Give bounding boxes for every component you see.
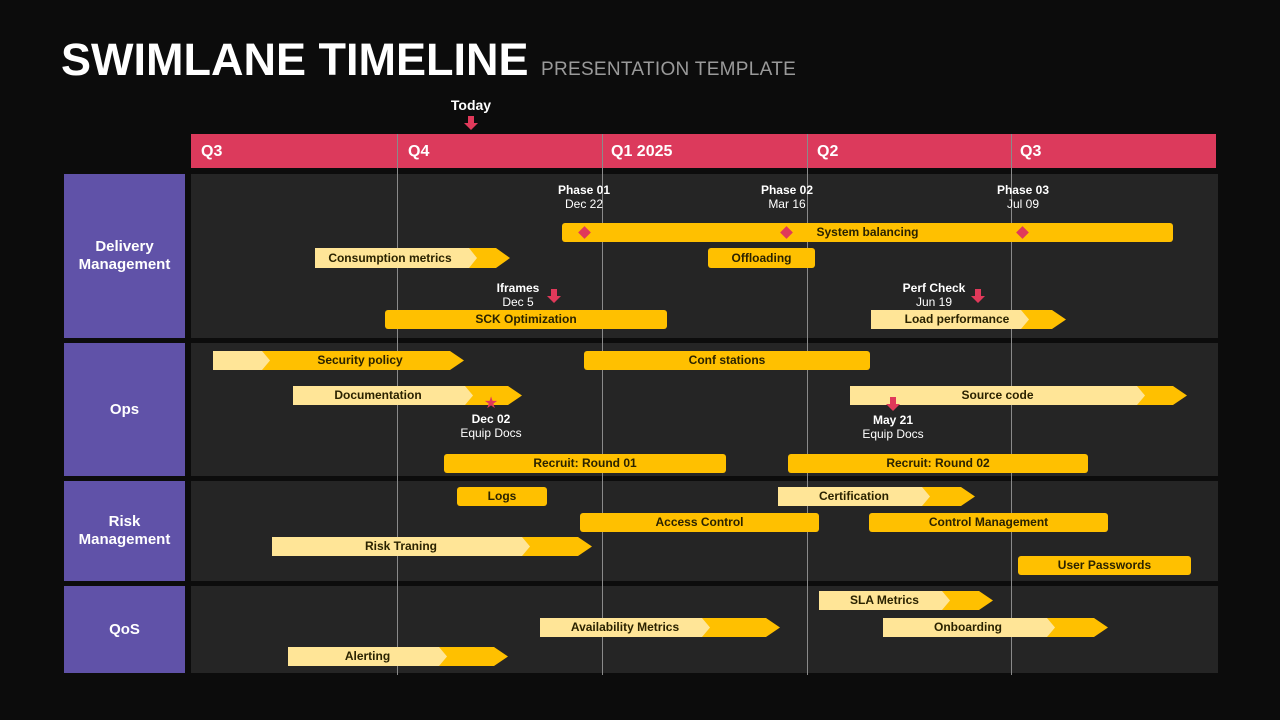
text: Q1 2025 — [611, 143, 672, 160]
bar: Recruit Round 01 — [444, 454, 726, 473]
bar: Documentation: Documentation — [334, 388, 422, 402]
bar: System balancing — [562, 223, 1173, 242]
milestone: Iframes: Dec 5 — [502, 295, 534, 309]
bar: Source code: Source code — [961, 388, 1034, 402]
milestone: Perf Check: Perf Check — [903, 281, 965, 295]
milestone: May 21 — [886, 397, 900, 411]
bar: Risk Traning: Risk Traning — [365, 539, 437, 553]
today marker — [451, 97, 491, 130]
quarter labels — [201, 143, 1041, 160]
bar: User Passwords: User Passwords — [1058, 558, 1151, 572]
bar: Source code — [850, 386, 1187, 405]
milestone: Dec 02 star: ★ — [484, 395, 498, 412]
bar: User Passwords — [1018, 556, 1191, 575]
title: SWIMLANE TIMELINE PRESENTATION TEMPLATE — [61, 34, 796, 85]
lane label: Delivery Management: Management — [79, 256, 170, 273]
lanes — [191, 174, 1218, 338]
bar: Onboarding: Onboarding — [934, 620, 1002, 634]
milestone: Iframes: Iframes — [497, 281, 539, 295]
milestone: Dec 02 star: Dec 02 — [472, 412, 510, 426]
text: Phase 02 — [761, 183, 813, 197]
bar: Alerting: Alerting — [345, 649, 390, 663]
bar: Consumption metrics: Consumption metrics — [328, 251, 452, 265]
bar: Onboarding — [883, 618, 1108, 637]
bar: Control Management — [869, 513, 1108, 532]
text: Q4 — [408, 143, 429, 160]
bar: Certification: Certification — [819, 489, 889, 503]
bar: Offloading: Offloading — [732, 251, 792, 265]
bar: Load performance: Load performance — [905, 312, 1009, 326]
bar: Recruit Round 02: Recruit: Round 02 — [886, 456, 990, 470]
milestone: Dec 02 star: Equip Docs — [460, 426, 522, 440]
lane label: Ops — [64, 343, 185, 476]
lane label: Risk Management: Management — [79, 531, 170, 548]
text: Q3 — [201, 143, 222, 160]
bar: Access Control — [580, 513, 819, 532]
lane label: Risk Management — [64, 481, 185, 581]
bar: Certification — [778, 487, 975, 506]
bar: Alerting — [288, 647, 508, 666]
milestones: phases: Dec 22 — [565, 197, 603, 211]
today marker: Today — [451, 97, 491, 113]
text: Q2 — [817, 143, 838, 160]
milestone: Dec 02 star — [460, 395, 522, 440]
bar: Logs: Logs — [488, 489, 516, 503]
bar: Offloading — [708, 248, 815, 268]
bar: Documentation — [293, 386, 522, 405]
bar: System balancing: System balancing — [816, 225, 919, 239]
bar: Logs — [457, 487, 547, 506]
lane label: Delivery Management: Delivery — [95, 238, 154, 255]
milestones: phases — [558, 183, 610, 211]
text: Equip Docs — [862, 427, 924, 441]
bar: Consumption metrics — [315, 248, 510, 268]
text: Jul 09 — [1007, 197, 1039, 211]
bar: Security policy: Security policy — [317, 353, 403, 367]
bar: SLA Metrics: SLA Metrics — [850, 593, 919, 607]
bar: Availability Metrics: Availability Metrics — [571, 620, 679, 634]
text: Mar 16 — [768, 197, 806, 211]
milestone: Perf Check: Jun 19 — [916, 295, 952, 309]
bar: Recruit Round 02 — [788, 454, 1088, 473]
bar: SCK Optimization: SCK Optimization — [475, 312, 577, 326]
text: Phase 03 — [997, 183, 1049, 197]
bar: Control Management: Control Management — [929, 515, 1048, 529]
bar: SLA Metrics — [819, 591, 993, 610]
text: May 21 — [873, 413, 913, 427]
bar: Recruit Round 01: Recruit: Round 01 — [533, 456, 637, 470]
milestone: Perf Check — [903, 281, 966, 309]
bar: Risk Traning — [272, 537, 592, 556]
bar: Load performance — [871, 310, 1066, 329]
lane label: QoS — [64, 586, 185, 673]
milestone: Iframes — [497, 281, 539, 309]
milestones: phases: Phase 01 — [558, 183, 610, 197]
lane label: Risk Management: Risk — [109, 513, 140, 530]
lane label: Ops: Ops — [110, 400, 139, 418]
bar: SCK Optimization — [385, 310, 667, 329]
text: Q3 — [1020, 143, 1041, 160]
lane label: QoS: QoS — [109, 620, 140, 638]
bar: Security policy — [213, 351, 464, 370]
bar: Availability Metrics — [540, 618, 780, 637]
bar: Conf stations: Conf stations — [689, 353, 765, 367]
header bar: quarters — [191, 134, 1216, 168]
bar: Conf stations — [584, 351, 870, 370]
bar: Access Control: Access Control — [655, 515, 744, 529]
lane label: Delivery Management — [64, 174, 185, 338]
